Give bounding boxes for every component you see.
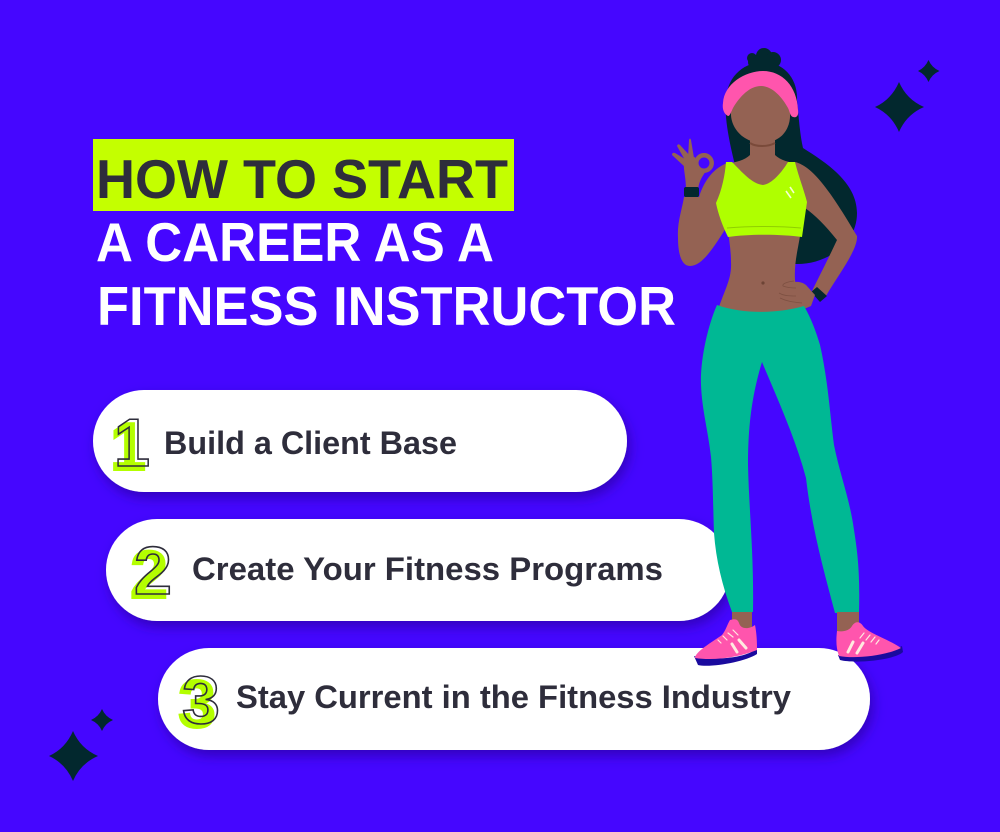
step 3 label: Stay Current in the Fitness Industry: [236, 679, 791, 715]
number 1: 1: [110, 409, 146, 485]
heading line 3: FITNESS INSTRUCTOR: [97, 275, 676, 337]
headband: [723, 71, 798, 117]
navel: [761, 281, 765, 285]
torso: [716, 230, 804, 316]
step 2 pill: [106, 519, 730, 621]
step 3 pill: [158, 648, 870, 750]
step 1 pill: [93, 390, 627, 492]
heading line 1: HOW TO START: [96, 148, 508, 210]
number 2: 2: [130, 537, 168, 613]
sparkle top large: [875, 82, 924, 132]
heading highlight: [93, 139, 514, 211]
illustration: fitness instructor: [672, 48, 903, 666]
heading line 2: A CAREER AS A: [96, 211, 494, 273]
sparkle top small: [918, 60, 940, 82]
heading: [93, 139, 676, 337]
wristbands: [684, 187, 827, 302]
hand on hip: [778, 281, 815, 309]
hand OK sign: [672, 138, 712, 190]
right shoe: [836, 622, 903, 662]
sparkle bottom small: [91, 709, 113, 731]
ankles: [732, 612, 859, 634]
hair: [726, 48, 857, 264]
left arm: [678, 163, 728, 266]
number 3: 3: [182, 662, 220, 738]
left shoe: [694, 619, 757, 666]
sports bra: [716, 162, 807, 237]
sparkle bottom large: [49, 731, 98, 781]
chin shadow: [750, 143, 775, 146]
number 1: 1: [114, 405, 150, 481]
step 1 label: Build a Client Base: [164, 425, 457, 461]
step 2 label: Create Your Fitness Programs: [192, 551, 663, 587]
face: [731, 85, 790, 143]
number 2: 2: [134, 533, 172, 609]
number 3: 3: [178, 666, 216, 742]
leggings: [701, 305, 859, 613]
neck: [727, 135, 797, 190]
right arm: [795, 162, 857, 296]
